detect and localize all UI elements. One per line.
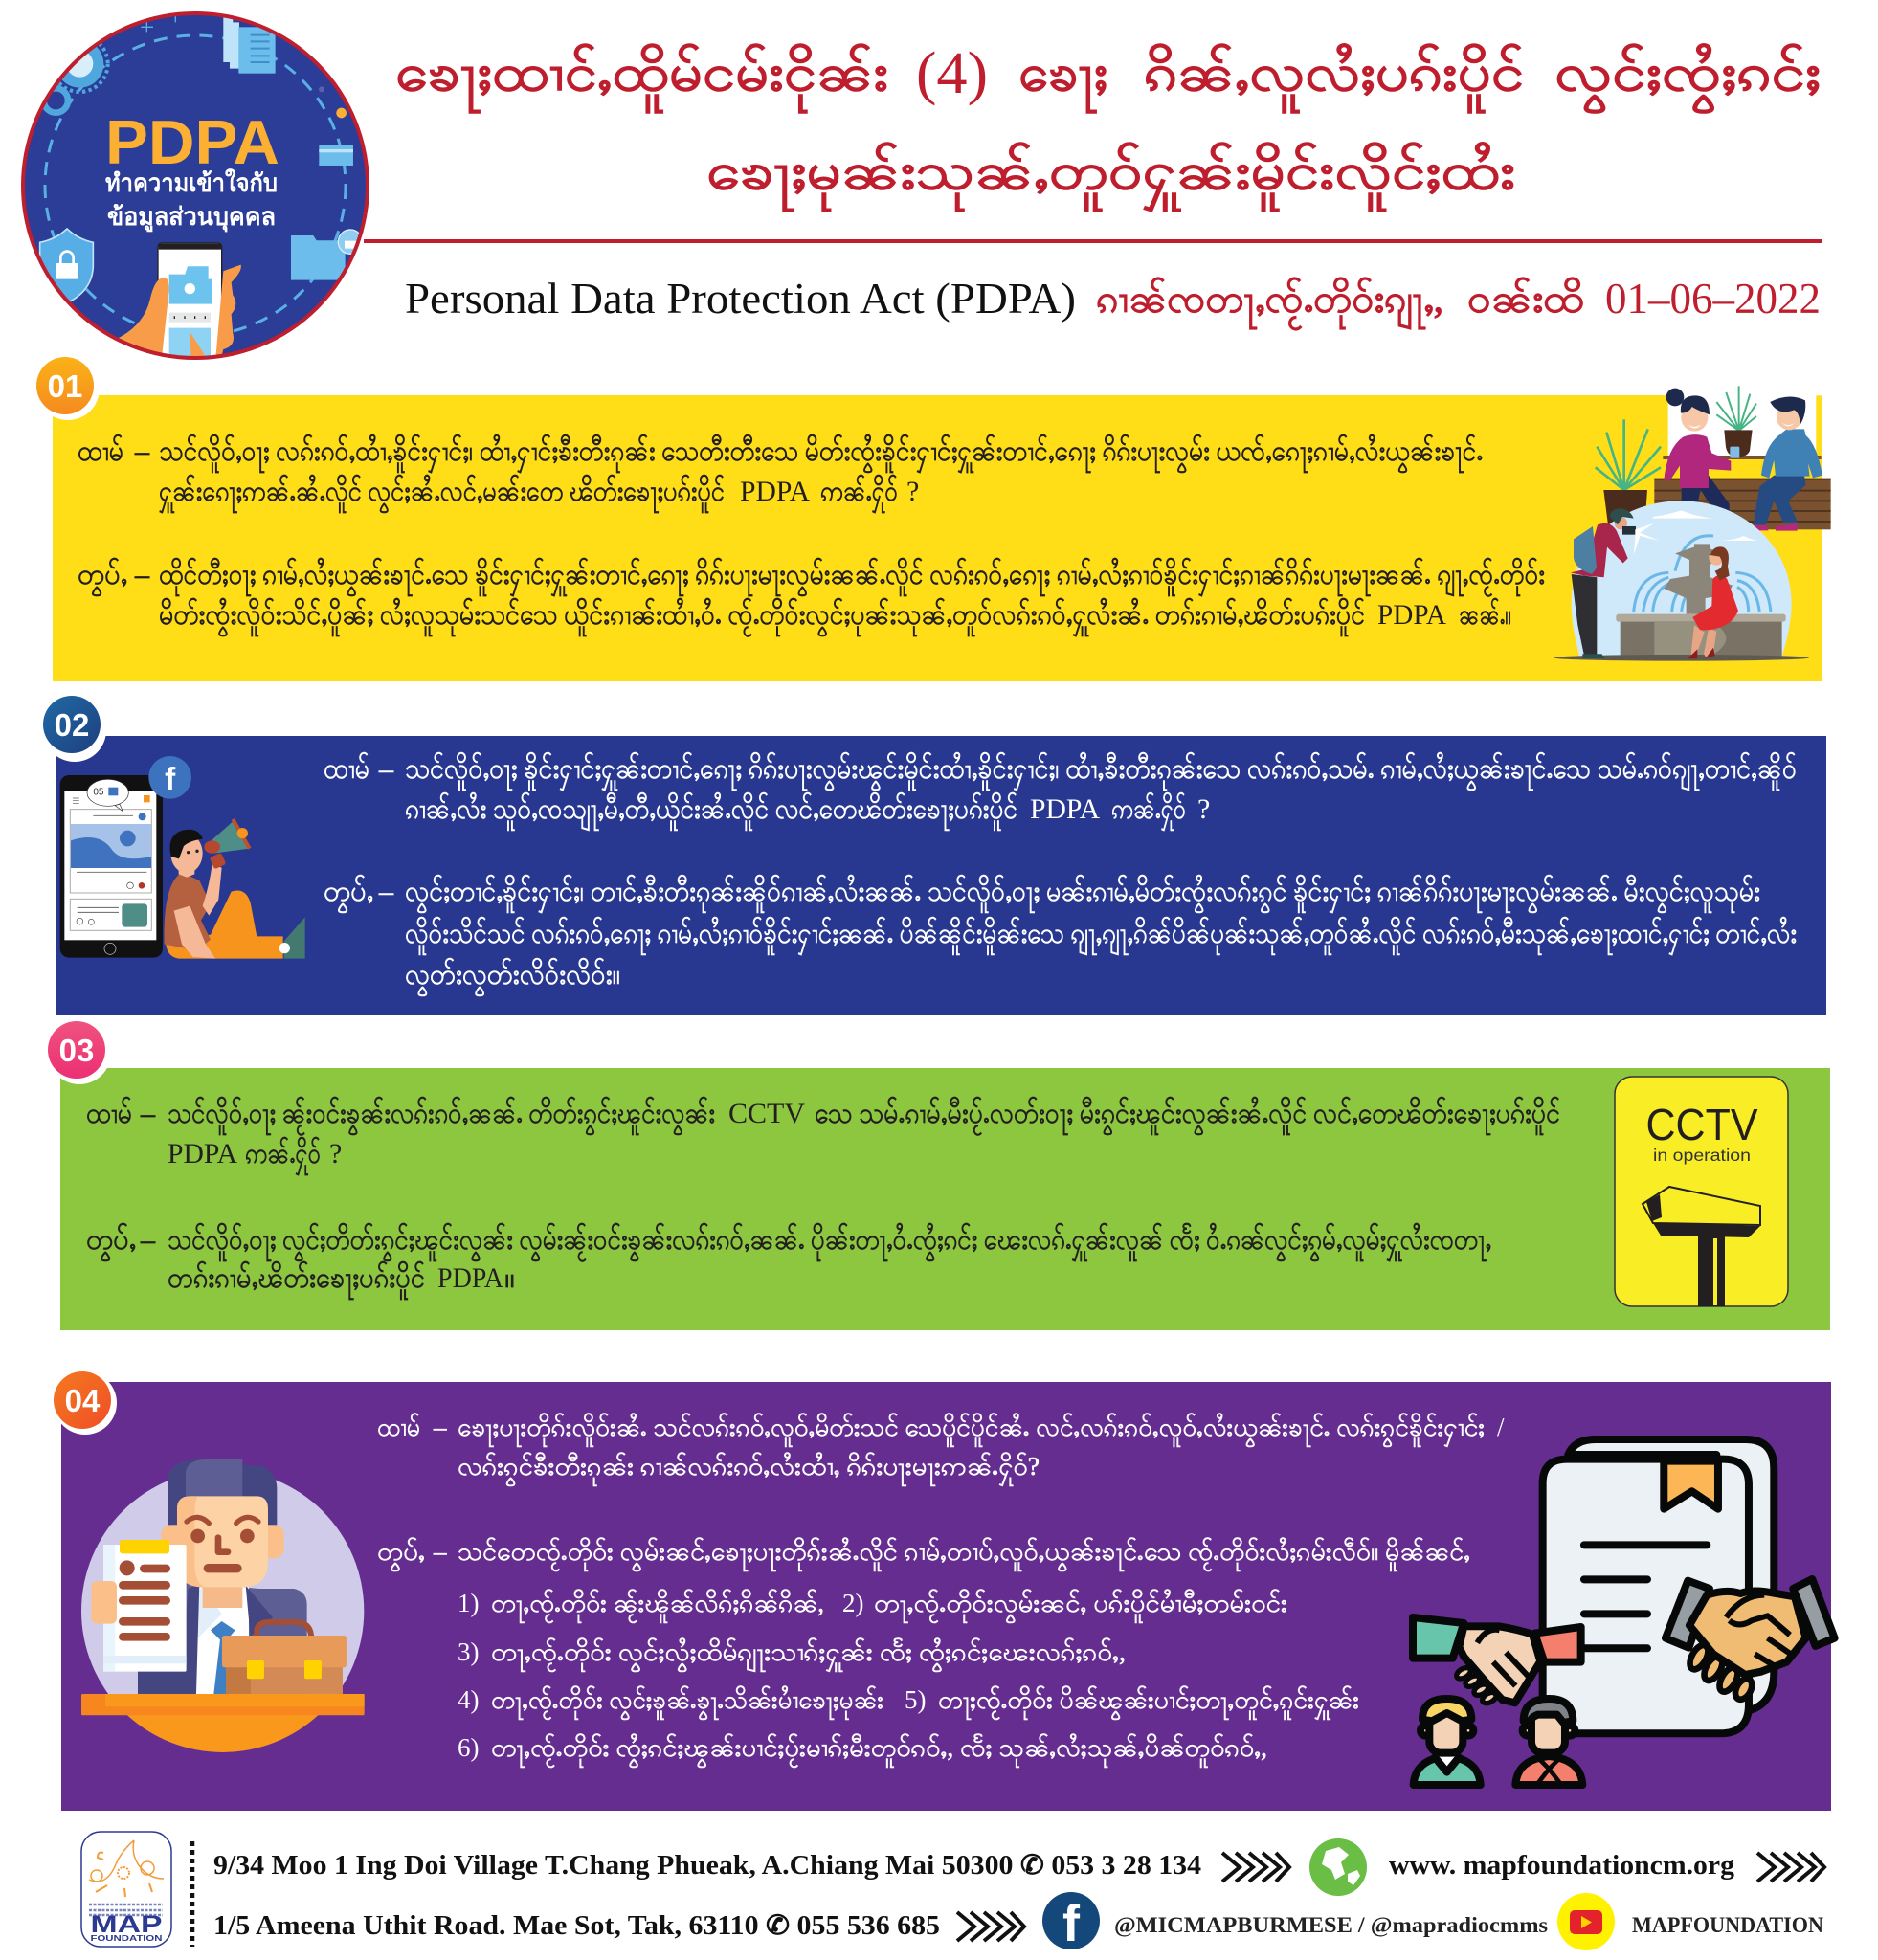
title: ၵိၼ်ႇလူလႆႈပၵ်းပိူင် [1144, 44, 1524, 113]
answer text and list: တႃႇၸႂ်ႉတိုဝ်း လွင်ႈၶူၼ်ႉၶွႃႉသိၼ်းမၢႆၶေႃႈမုၼ်း [491, 1684, 883, 1721]
subtitle [405, 275, 1821, 331]
badge 03: 03 [59, 1033, 94, 1068]
answer text: မိတ်းၸွႆးလိူဝ်းသိင်ႇပိူၼ်ႈ လႆႈလူသုမ်းသင်သေ ယိူင်းၵၢၼ်းထၢႆႇဝႆႉ ၸႂ်ႉတိုဝ်းလွင်ႈပုၼ်းသုၼ်ႇတူဝ်လၵ်းၵဝ်ႇႁူလႆးၼႆႉ တၵ်းၵၢမ်ႇၽိတ်းပၵ်းပိူင် [159, 598, 1365, 637]
subtitle: ၵၢၼ်ၸတႃႇၸႂ်ႉတိုဝ်းၵျႃႇ, [1096, 276, 1443, 331]
icon: PDPA circle badge: ข้อมูลส่วนบุคคล [107, 202, 276, 233]
panel: question 01 [36, 357, 1831, 681]
answer text: သင်လိူဝ်ႇဝႃႈ လွင်ႈတိတ်းၵွင်ႈၽူင်းလွၼ်း လွမ်းၼႂ်းဝင်းၶွၼ်းလၵ်းၵဝ်ႇၼၼ်ႉ ပိုၼ်းတႃႇဝႆႉၸွႆႈၵင်ႈ ၽေးလၵ်ႉႁူၼ်းလူၼ် ၸႅႈ ဝႆႉၵၼ်လွင်ႈၵွမ်ႇလူမ်ႈႁူလႆးၸတႃႇ [168, 1223, 1491, 1262]
large handshake [1666, 1581, 1710, 1648]
question text: – [378, 753, 394, 785]
answer text: လွင်ႈတၢင်ႇၶိူင်းႁၢင်ႈ၊ တၢင်ႇၶီးတီးၵုၼ်းၼိူဝ်ၵၢၼ်ႇလႆးၼၼ်ႉ သင်လိူဝ်ႇဝႃႈ မၼ်းၵၢမ်ႇမိတ်းၸွႆးလၵ်းၵွင် ၶိူင်းႁၢင်ႈ ၵၢၼ်ၵိၵ်းပႃးမႃးလွမ်းၼၼ်ႉ မီးလွင်ႈလူသုမ်း [405, 875, 1760, 914]
answer text and list: 4) [458, 1685, 479, 1714]
question text: ? [906, 476, 919, 507]
question text: ? [329, 1138, 342, 1169]
question text: ဢၼ်ႉႁိုဝ် [245, 1137, 321, 1176]
footer: MAP foundation logo: FOUNDATION [90, 1934, 163, 1943]
question text: ထၢမ် [78, 434, 123, 467]
question text: – [140, 1098, 156, 1129]
footer: Chiang Mai address: 9/34 Moo 1 Ing Doi Village T.Chang Phueak, A.Chiang Mai 50300 ✆ 053 3 28 134 [213, 1851, 1201, 1881]
answer text and list: တႃႇၸႂ်ႉတိုဝ်း ၼႂ်းၽိူၼ်လိၵ်ႈၵိၼ်ၵိၼ်, [491, 1589, 824, 1624]
icon: globe [1309, 1838, 1367, 1896]
illustration: phone and man with megaphone: f [165, 762, 176, 797]
badge 01: 01 [48, 368, 82, 404]
question text [78, 434, 1483, 514]
question text: ႁူၼ်းၵေႃႈဢၼ်ႉၼႆႉလိူင် လွင်ႈၼႆႉလင်ႇမၼ်းတေ ၽိတ်းၶေႃႈပၵ်းပိူင် [159, 475, 725, 514]
footer: Mae Sot address: 1/5 Ameena Uthit Road. Mae Sot, Tak, 63110 ✆ 055 536 685 [213, 1911, 940, 1941]
answer text: တွပ်ႇ [86, 1223, 136, 1262]
question text: သင်လိူဝ်ႇဝႃႈ ၼႂ်းဝင်းၶွၼ်းလၵ်းၵဝ်ႇၼၼ်ႉ တိတ်းၵွင်ႈၽူင်းလွၼ်း [168, 1097, 715, 1136]
answer text [78, 558, 1545, 637]
badge 04 [54, 1371, 117, 1435]
question text: ဢၼ်ႉႁိုဝ် [1111, 792, 1186, 832]
title: (4) [916, 41, 988, 106]
footer: MAP foundation logo: MAP [90, 1911, 163, 1938]
header rule [364, 239, 1822, 243]
answer text: လွတ်းလွတ်းလိဝ်းလိဝ်း။ [405, 958, 620, 997]
answer text and list: တႃႇၸႂ်ႉတိုဝ်း လွင်ႈလွႆႈထိမ်ၵျႃးသၢၵ်ႈႁူၼ်း ၸႅႈ ၸွႆႈၵင်ႈၽေးလၵ်ႈၵဝ်ႇ, [491, 1637, 1126, 1673]
footer: MAP foundation logo [81, 1832, 171, 1947]
panel: question 02 [43, 696, 1826, 1015]
question text: ၵၢၼ်ႇလႆး သူဝ်ႇၸသျႃႇမီႇတီႇယိူင်းၼႆႉလိူင် လင်ႇတေၽိတ်းၶေႃႈပၵ်းပိူင် [405, 792, 1017, 832]
title: ၶေႃႈ [1018, 44, 1107, 113]
answer text and list: တႃႇၸႂ်ႉတိုဝ်းလွမ်းၼင်ႇ ပၵ်းပိူင်မၢႆမီႈတမ်းဝင်း [874, 1588, 1287, 1624]
subtitle: Personal Data Protection Act (PDPA) [405, 275, 1076, 323]
answer text: – [378, 876, 394, 907]
answer text: PDPA [437, 1262, 503, 1294]
answer text: ထိုင်တီႈဝႃႈ ၵၢမ်ႇလႆႈယွၼ်းၶႃင်ႉသေ ၶိူင်းႁၢင်ႈႁူၼ်းတၢင်ႇၵေႃႈ ၵိၵ်းပႃးမႃးလွမ်းၼၼ်ႉလိူင် လၵ်းၵဝ်ႇၵေႃႈ ၵၢမ်ႇလႆႈၵၢဝ်ၶိူင်းႁၢင်ႈၵၢၼ်ၵိၵ်းပႃးမႃးၼၼ်ႉ ၵျႃႇၸႂ်ႉတိုဝ်း [159, 558, 1545, 597]
arrow: chevrons [1222, 1853, 1289, 1882]
title: လွင်ႈၸွႆႈၵင်ႈ [1554, 44, 1821, 113]
badge 04: 04 [65, 1383, 101, 1418]
answer text and list: 1) [458, 1589, 479, 1617]
answer text and list: – [433, 1537, 447, 1566]
question text: ၶေႃႈပႃးတိုၵ်းလိူဝ်းၼႆႉ သင်လၵ်းၵဝ်ႇလူဝ်ႇမိတ်းသင် သေပိူင်ပိူင်ၼႆႉ လင်ႇလၵ်းၵဝ်ႇလူဝ်ႇလႆးယွၼ်းၶႃင်ႉ လၵ်းၵွင်ၶိူင်းႁၢင်ႈ [458, 1412, 1485, 1447]
icon: CCTV sign: CCTV [1646, 1100, 1758, 1149]
badge 01 [36, 357, 100, 420]
question text: ထၢမ် [324, 752, 369, 785]
photographer [1572, 574, 1597, 656]
illustration: phone and man with megaphone [60, 756, 305, 959]
answer text and list: 5) [905, 1685, 927, 1714]
answer text and list: တွပ်ႇ [377, 1537, 425, 1571]
answer text and list: သင်တေၸႂ်ႉတိုဝ်း လွမ်းၼင်ႇၶေႃႈပႃးတိုၵ်းၼႆႉလိူင် ၵၢမ်ႇတၢပ်ႇလူဝ်ႇယွၼ်းၶႃင်ႉသေ ၸႂ်ႉတိုဝ်းလႆႈၵမ်းလဵဝ်။ မိူၼ်ၼင်ႇ [458, 1536, 1470, 1572]
title: ၶေႃႈမုၼ်းသုၼ်ႇတူဝ်ႁူၼ်းမိူင်းလိူင်ႈထႆး [706, 143, 1515, 212]
question text [86, 1097, 1560, 1176]
answer text: – [140, 1224, 156, 1256]
answer text and list: 3) [458, 1637, 479, 1666]
question text [324, 752, 1797, 832]
question text: PDPA [740, 476, 810, 507]
badge 02: 02 [55, 707, 89, 743]
badge 02 [43, 696, 106, 762]
question text [377, 1412, 1505, 1486]
icon: facebook [1042, 1892, 1100, 1952]
illustration: phone and man with megaphone: 05 [93, 788, 104, 798]
question text: PDPA [1030, 793, 1100, 825]
question text: – [134, 435, 150, 467]
question text: ? [1197, 793, 1210, 825]
question text: CCTV [728, 1098, 805, 1129]
illustration: contract and handshakes [1413, 1439, 1835, 1785]
question text: – [433, 1413, 447, 1441]
question text: ဢၼ်ႉႁိုဝ် [820, 475, 898, 514]
icon: CCTV sign: in operation [1653, 1146, 1751, 1165]
question text: လၵ်းၵွင်ၶီးတီးၵုၼ်း ၵၢၼ်လၵ်းၵဝ်ႇလႆးထၢႆႇ ၵိၵ်းပႃးမႃးဢၼ်ႉႁိုဝ်? [458, 1451, 1040, 1486]
title: ၶေႃႈထၢင်ႇထိူမ်ငမ်းငိုၼ်း [395, 44, 888, 113]
icon: youtube [1557, 1893, 1615, 1950]
man on bench [1754, 476, 1806, 524]
question text: ထၢမ် [377, 1413, 420, 1441]
footer: social handles: @MICMAPBURMESE / @mapradiocmms [1114, 1913, 1548, 1938]
icon: CCTV sign [1615, 1077, 1788, 1306]
answer text and list: 6) [458, 1733, 479, 1762]
footer: youtube channel: MAPFOUNDATION [1632, 1913, 1823, 1937]
woman in red [1691, 625, 1716, 658]
question text: သင်လိူဝ်ႇဝႃႈ လၵ်းၵဝ်ႇထၢႆႇၶိူင်းႁၢင်ႈ၊ ထၢႆႇႁၢင်ႈၶီးတီးၵုၼ်း သေတီးတီးသေ မိတ်းၸွႆးၶိူင်းႁၢင်ႈႁူၼ်းတၢင်ႇၵေႃႈ ၵိၵ်းပႃးလွမ်း ယၸ်ႇၵေႃႈၵၢမ်ႇလႆးယွၼ်းၶႃင်ႉ [159, 434, 1483, 474]
title [395, 41, 1821, 212]
arrow: chevrons [1757, 1853, 1824, 1882]
answer text and list: 2) [842, 1589, 863, 1617]
footer: website: www. mapfoundationcm.org [1389, 1851, 1734, 1881]
panel: question 04 [54, 1371, 1835, 1811]
answer text: တွပ်ႇ [78, 558, 127, 597]
woman on bench [1682, 476, 1730, 517]
panel: question 03 [48, 1021, 1830, 1330]
answer text: PDPA [1377, 599, 1446, 631]
fountain dome [1572, 501, 1792, 657]
subtitle: ဝၼ်းထိ [1467, 276, 1584, 321]
answer text and list: တႃႇၸႂ်ႉတိုဝ်း ၸွႆႈၵင်ႈၽွၼ်းပၢင်ႈပႂ်းမၢၵ်ႈမီးတူဝ်ၵဝ်ႇ, ၸႅႈ သုၼ်ႇလႆႈသုၼ်ႇပိၼ်တူဝ်ၵဝ်ႇ, [491, 1732, 1267, 1769]
question text: / [1497, 1413, 1505, 1441]
answer text [86, 1223, 1491, 1301]
arrow: chevrons [957, 1912, 1024, 1941]
badge 03 [48, 1021, 111, 1084]
question text: PDPA [168, 1138, 237, 1169]
answer text: တၵ်းၵၢမ်ႇၽိတ်းၶေႃႈပၵ်းပိူင် [168, 1261, 425, 1301]
answer text: ။ [504, 1262, 515, 1294]
answer text: – [134, 559, 150, 590]
icon: facebook: f [1062, 1895, 1081, 1952]
answer text: ၼၼ်ႉ။ [1459, 598, 1511, 631]
icon: PDPA circle badge [23, 13, 368, 364]
question text: ထၢမ် [86, 1097, 132, 1129]
icon: PDPA circle badge: ทำความเข้าใจกับ [105, 168, 278, 197]
answer text: တွပ်ႇ [324, 875, 373, 914]
icon: PDPA circle badge: PDPA [105, 107, 279, 177]
answer text and list [377, 1536, 1470, 1769]
small handshake [1413, 1617, 1464, 1659]
illustration: people at fountain [1554, 373, 1831, 661]
two people icons [1414, 1756, 1481, 1785]
subtitle: 01–06–2022 [1605, 275, 1821, 323]
answer text and list: တႃႈၸႂ်ႉတိုဝ်း ပိၼ်ၽွၼ်းပၢင်ႈတႃႇတူင်ႇၵူင်းႁူၼ်း [938, 1685, 1359, 1721]
answer text [324, 875, 1797, 997]
question text: သေ သမ်ႉၵၢမ်ႇမီးပႂ်ႉလတ်းဝႃႈ မီးၵွင်ႈၽူင်းလွၼ်းၼႆႉလိူင် လင်ႇတေၽိတ်းၶေႃႈပၵ်းပိူင် [815, 1097, 1560, 1136]
illustration: businessman with document and briefcase [81, 1459, 365, 1752]
